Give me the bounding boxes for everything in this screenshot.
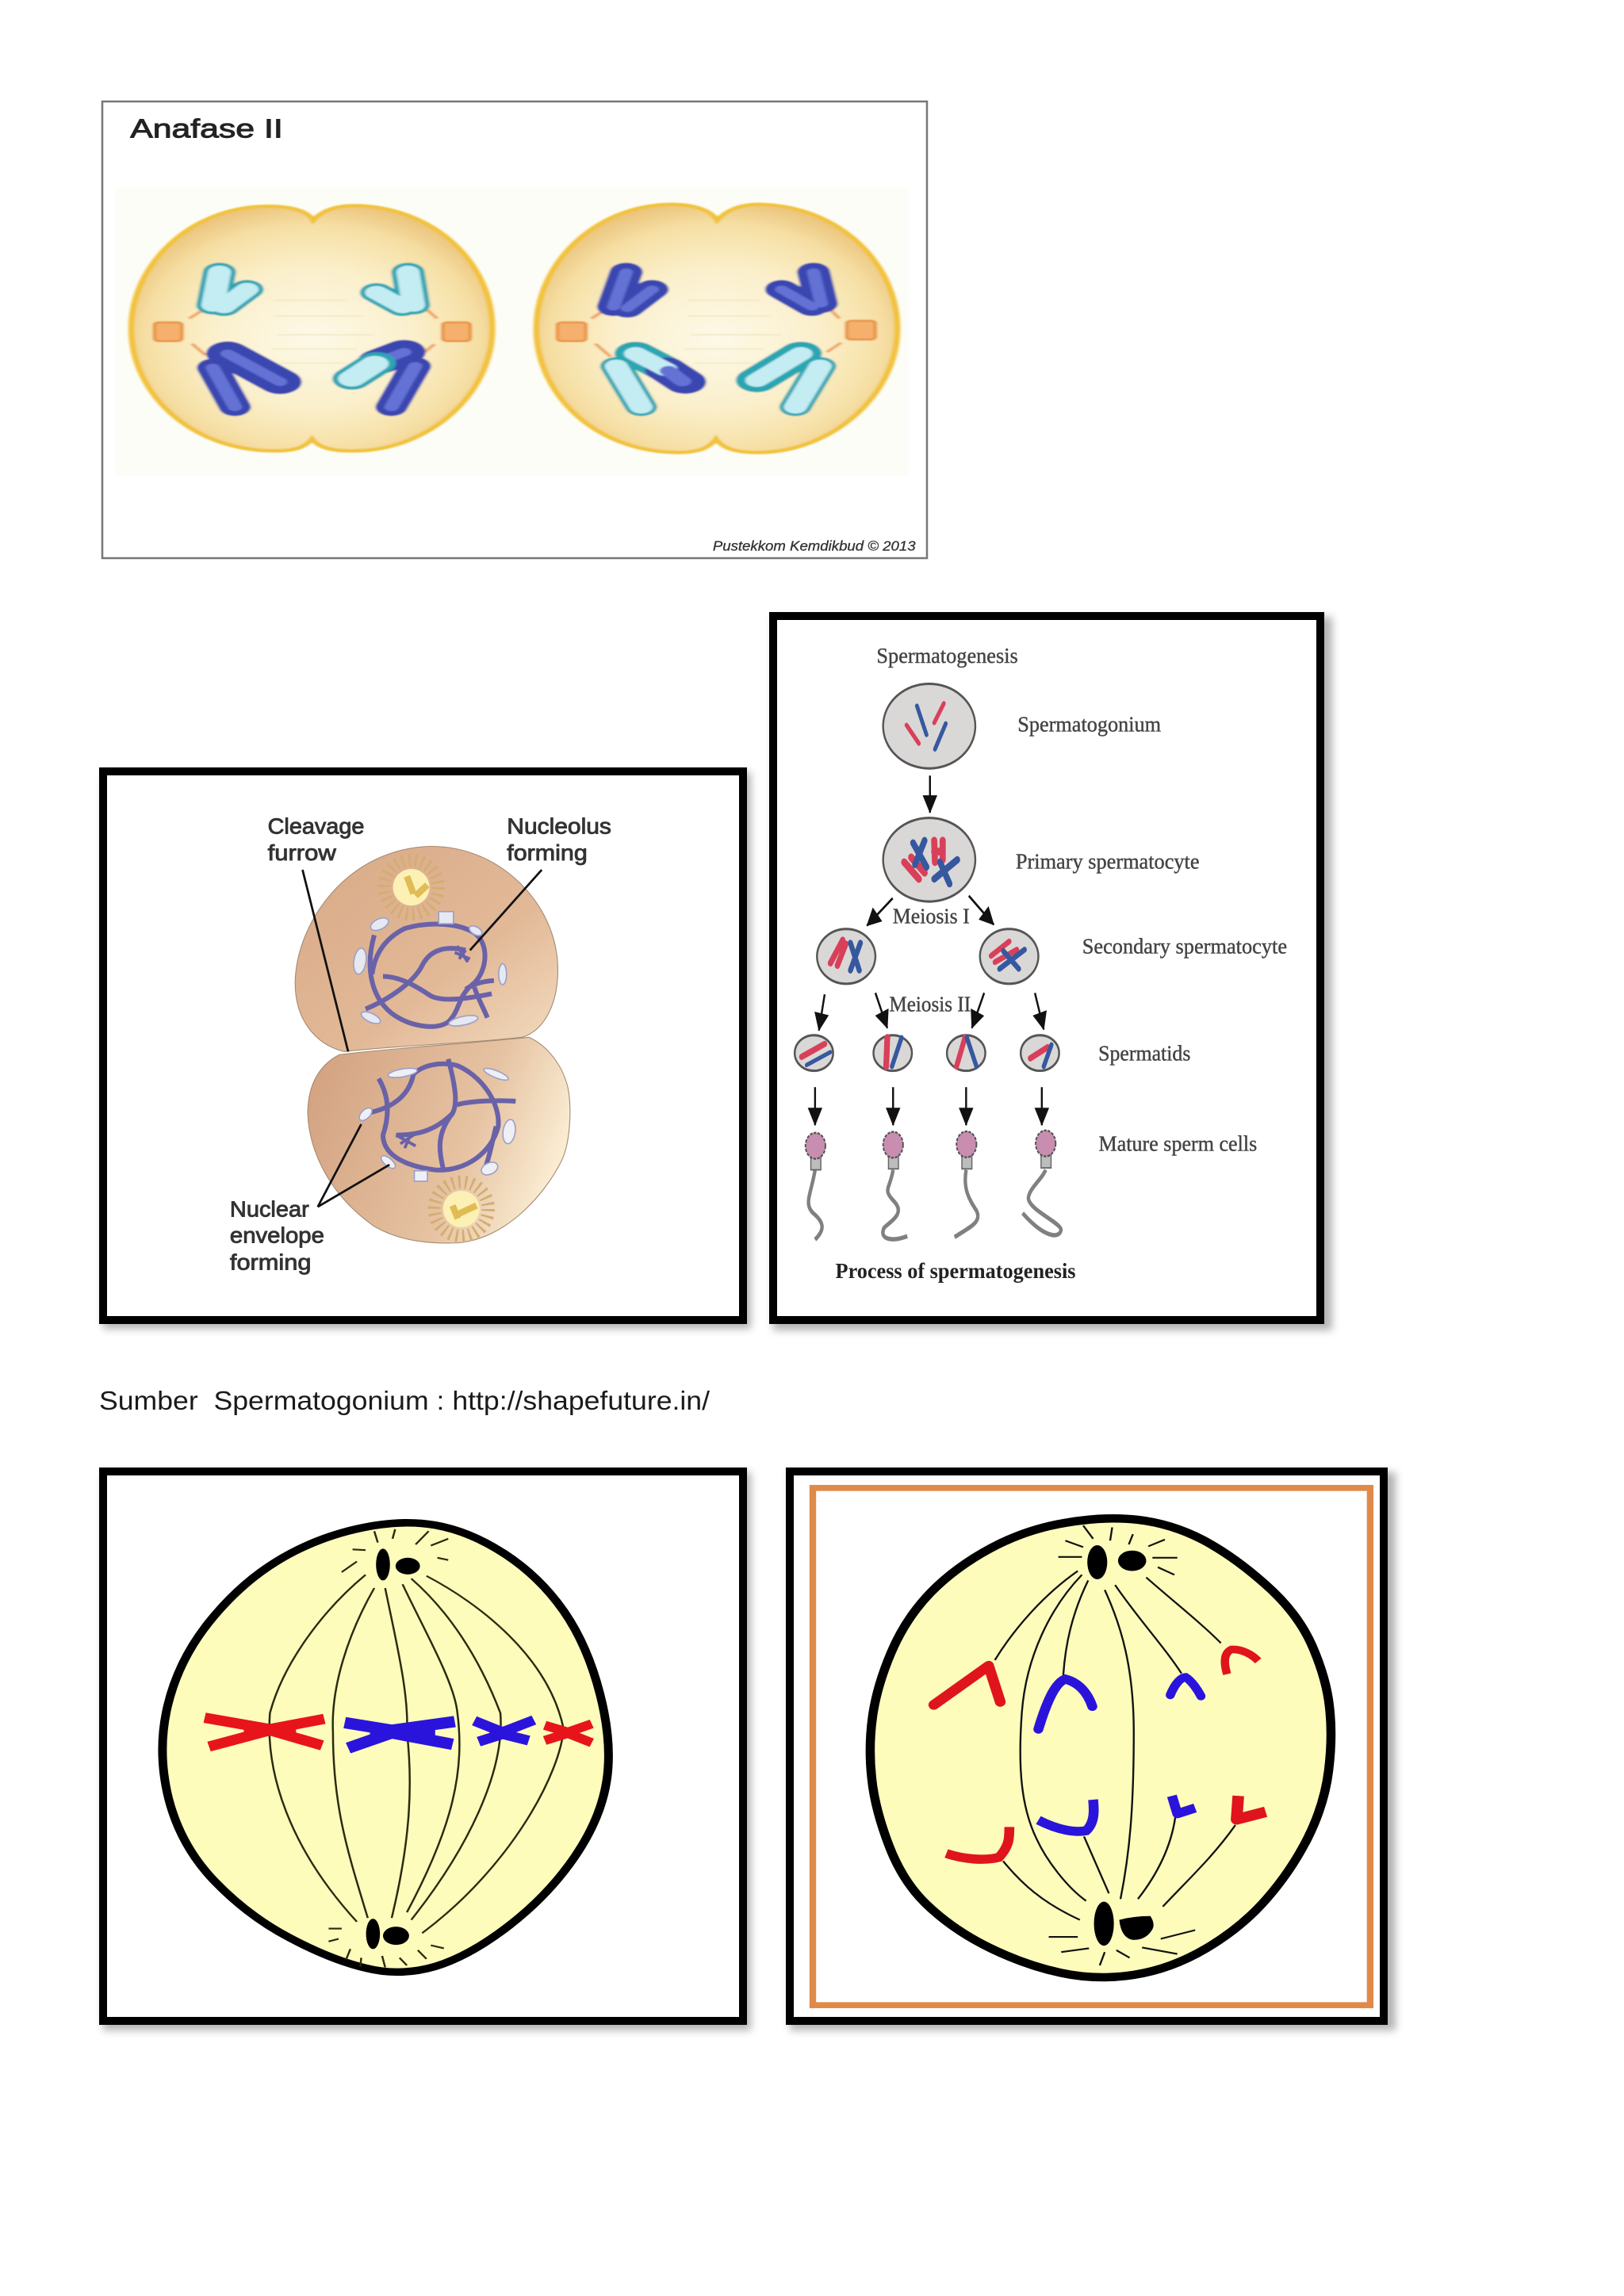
right dividing cell [536, 205, 898, 453]
stage labels: Meiosis I [893, 904, 970, 928]
panel frame [102, 101, 927, 558]
stage labels: Secondary spermatocyte [1082, 934, 1287, 959]
label: Nucleolus forming: Nucleolus [507, 814, 611, 839]
diagram background [115, 188, 909, 476]
panel frame [790, 1471, 1384, 2021]
cell body [163, 1523, 608, 1972]
cells and chromosomes [795, 683, 1059, 1071]
red chromatid: upper left [934, 1666, 1000, 1705]
mature sperm cells [806, 1131, 1061, 1239]
centrosomes [366, 1548, 420, 1949]
panel: anaphase cell [790, 1471, 1396, 2030]
label: Nuclear envelope forming [230, 1196, 324, 1275]
label: Cleavage furrow [268, 814, 364, 865]
stage labels: Spermatogonium [1017, 712, 1161, 737]
leader lines [303, 870, 542, 1207]
red chromosome: large [205, 1718, 324, 1747]
credit line: Pustekkom Kemdikbud © 2013 [713, 538, 916, 554]
panel: spermatogenesis [773, 616, 1332, 1330]
blue chromatid: lower middle [1038, 1800, 1094, 1831]
source caption: Sumber Spermatogonium : http://shapefuture.in/ [99, 1386, 710, 1415]
red chromatid: far lower right [1236, 1796, 1266, 1820]
lower daughter cell [308, 1037, 570, 1243]
blue chromatid: upper middle [1038, 1679, 1092, 1729]
blue chromatid: upper right [1170, 1677, 1201, 1696]
cell body [870, 1518, 1331, 1977]
heading: Anafase II: Anafase II [130, 114, 283, 144]
red chromatid: lower left [946, 1827, 1009, 1859]
stage labels: Spermatogenesis [876, 643, 1018, 668]
panel: metaphase cell [103, 1471, 751, 2030]
stage labels: Meiosis II [889, 992, 971, 1016]
red chromosome: small [545, 1724, 592, 1743]
centrosomes [1087, 1545, 1154, 1946]
blue chromatid: lower right [1172, 1796, 1195, 1814]
label: Cleavage furrow: Cleavage [268, 814, 364, 839]
label: Nuclear envelope forming: Nuclear [230, 1196, 309, 1221]
blue chromosome: small [474, 1720, 534, 1742]
panel frame [103, 771, 743, 1320]
panel frame [103, 1471, 743, 2021]
stage labels: Mature sperm cells [1099, 1131, 1257, 1156]
red chromatid: far upper right [1225, 1649, 1258, 1674]
stage labels: Spermatids [1098, 1041, 1190, 1066]
stage labels [876, 643, 1287, 1156]
spindle fibres [995, 1525, 1235, 1965]
spindle fibres [270, 1529, 564, 1967]
orange inner border [813, 1488, 1370, 2005]
panel: telophase cell [103, 771, 751, 1329]
stage labels: Primary spermatocyte [1016, 849, 1200, 874]
upper daughter cell [295, 847, 557, 1051]
label: Nuclear envelope forming: envelope [230, 1223, 324, 1248]
caption: Process of spermatogenesis: Process of spermatogenesis [836, 1259, 1076, 1284]
blue chromosome: large [345, 1721, 454, 1748]
label: Cleavage furrow: furrow [268, 840, 336, 865]
left dividing cell [132, 205, 492, 451]
label: Nucleolus forming [507, 814, 611, 865]
panel frame [773, 616, 1320, 1320]
panel: Anafase II [102, 101, 927, 558]
arrows [815, 775, 1044, 1125]
label: Nucleolus forming: forming [507, 840, 588, 865]
label: Nuclear envelope forming: forming [230, 1250, 311, 1275]
